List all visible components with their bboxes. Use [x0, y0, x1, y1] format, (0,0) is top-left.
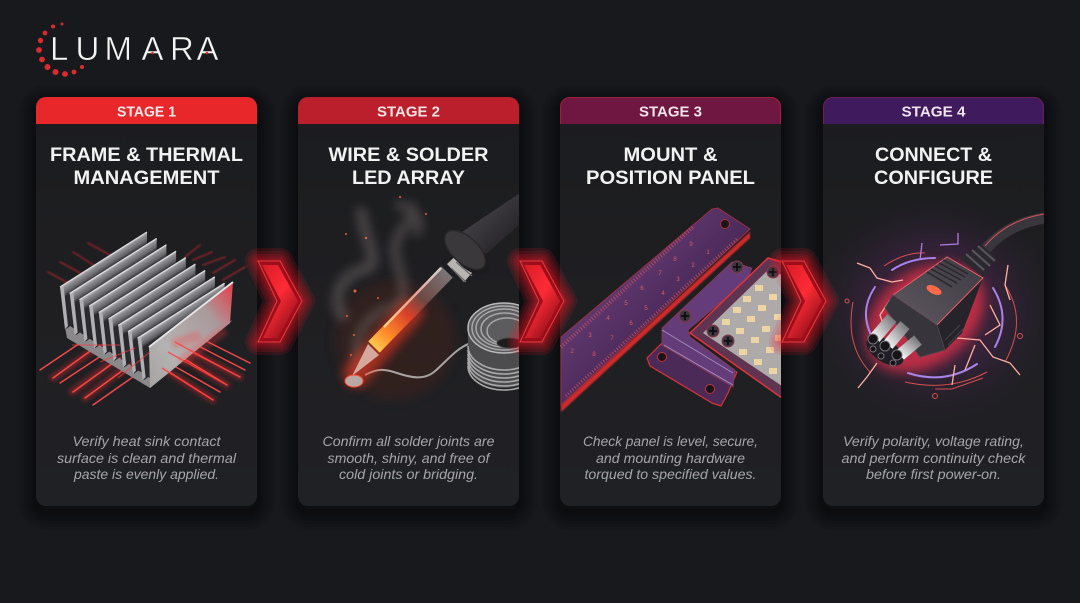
panel: stage 4 [810, 97, 1060, 512]
stage 1 heading: FRAME & THERMAL [50, 144, 243, 166]
ruler: 5 [624, 301, 628, 307]
stage 1 header: STAGE 1 [117, 104, 176, 120]
panel: stage 3 [560, 97, 783, 512]
stage 2 description: cold joints or bridging. [339, 466, 478, 482]
stage 4 header: STAGE 4 [902, 104, 966, 120]
red reflections on the base [72, 330, 236, 398]
sparks [345, 196, 427, 356]
stage 3 heading: POSITION PANEL [586, 167, 755, 189]
stage 2 description: Confirm all solder joints are [322, 433, 495, 449]
stage 3 heading: MOUNT & [624, 144, 718, 166]
stage 1 heading: MANAGEMENT [74, 167, 220, 189]
illustration: soldering iron [335, 193, 540, 400]
base [64, 320, 232, 388]
stage 2 heading [328, 144, 488, 189]
stage 4 description: and perform continuity check [842, 450, 1027, 466]
LED chips [722, 285, 783, 374]
stage 4 heading [874, 144, 993, 189]
stage 4 description: Verify polarity, voltage rating, [843, 433, 1024, 449]
stage 3 description [583, 433, 758, 482]
ruler: 1 [706, 250, 710, 256]
ruler: 3 [676, 277, 680, 283]
arrow: stage 1 to 2 [258, 261, 302, 342]
arrow: stage 2 to 3 [520, 261, 564, 342]
stage 2 description: smooth, shiny, and free of [328, 450, 492, 466]
panel: stage 2 [298, 97, 540, 512]
stage 1 description: Verify heat sink contact [72, 433, 222, 449]
pins [875, 318, 918, 355]
illustration: heat sink [40, 232, 250, 405]
stage 1 description: surface is clean and thermal [57, 450, 237, 466]
panel: stage 1 [36, 97, 257, 512]
stage 4 description: before first power-on. [866, 466, 1001, 482]
stage 2 heading: LED ARRAY [352, 167, 465, 189]
red circuit arcs [845, 253, 1022, 398]
logo: Lumara [36, 22, 219, 77]
illustration: ruler and LED panel [561, 208, 783, 412]
glow backdrop [842, 224, 1028, 394]
ruler: 8 [592, 352, 596, 358]
stage 1 heading [50, 144, 243, 189]
stage 3 header: STAGE 3 [639, 104, 702, 120]
wordmark accent dots [151, 52, 208, 54]
arrow: stage 3 to 4 [782, 261, 826, 342]
stage 3 heading [586, 144, 755, 189]
solder blob [345, 375, 363, 387]
red heat rays [40, 243, 250, 405]
status LED [926, 285, 942, 295]
stage 3 description: torqued to specified values. [584, 466, 756, 482]
ruler [561, 208, 750, 412]
ruler: 2 [570, 349, 574, 355]
iron shaft [374, 272, 447, 347]
stage 3 description: and mounting hardware [596, 450, 745, 466]
stage 4 description [842, 433, 1027, 482]
stage 2 description [322, 433, 495, 482]
icon: dotted ring [36, 22, 84, 77]
purple arcs [866, 258, 1003, 377]
stage 1 description: paste is evenly applied. [73, 466, 219, 482]
solder coil [467, 302, 519, 391]
connector body [937, 278, 983, 350]
stage 2 header [298, 97, 519, 124]
wire [365, 343, 471, 377]
strain relief [960, 245, 996, 278]
pin face [866, 338, 904, 366]
stage 3 header [560, 97, 781, 124]
iron handle [462, 193, 520, 254]
lightning [857, 233, 1020, 388]
bracket flange [647, 343, 737, 406]
stage 2 heading: WIRE & SOLDER [328, 144, 488, 166]
ruler: 4 [606, 316, 610, 322]
bracket top strip [662, 262, 752, 387]
stage 4 heading: CONFIGURE [874, 167, 993, 189]
ruler: 2 [691, 263, 695, 269]
stage 1 header [36, 97, 257, 124]
illustration: power connector [842, 212, 1044, 399]
stage 1 description [57, 433, 237, 482]
ruler: 9 [689, 242, 693, 248]
vent ribs [927, 260, 968, 287]
ruler: 5 [644, 306, 648, 312]
fins [60, 232, 233, 388]
sockets [868, 334, 902, 366]
ruler: 6 [629, 321, 633, 327]
stage 4 header [823, 97, 1044, 124]
iron collar [444, 230, 486, 282]
stage 2 header: STAGE 2 [377, 104, 440, 120]
ruler: 7 [658, 271, 662, 277]
ruler: 8 [673, 257, 677, 263]
ruler: 3 [588, 333, 592, 339]
LED panel [690, 258, 782, 398]
cable [985, 218, 1044, 250]
smoke [338, 205, 419, 372]
wordmark: LUMARA [50, 30, 219, 67]
ruler: 6 [640, 286, 644, 292]
ruler: 7 [610, 336, 614, 342]
iron glow [356, 312, 410, 374]
stage 3 description: Check panel is level, secure, [583, 433, 758, 449]
screws [679, 261, 779, 347]
stage 4 heading: CONNECT & [875, 144, 992, 166]
ruler: 4 [661, 291, 665, 297]
warm backdrop glow [335, 280, 455, 400]
